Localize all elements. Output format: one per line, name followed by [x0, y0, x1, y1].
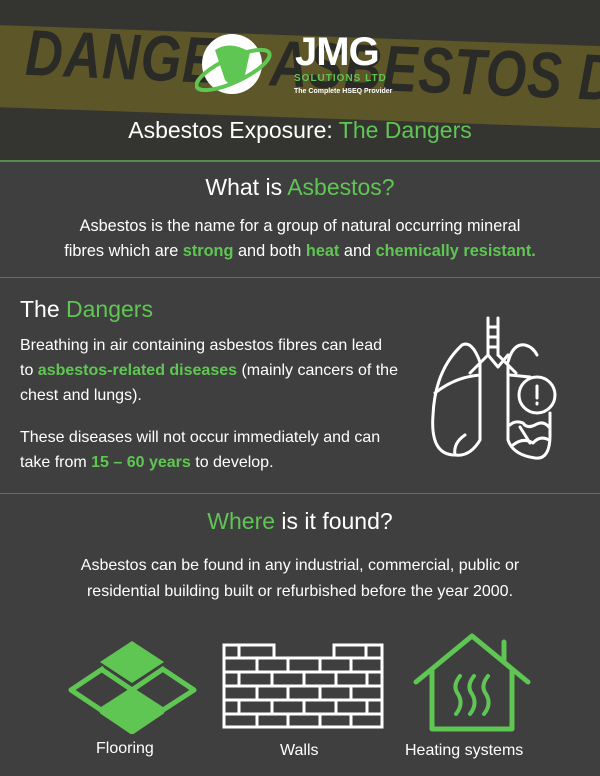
text: where: residential building built or refurbished before the year 2000. — [87, 583, 513, 600]
icon: heating house — [414, 633, 530, 732]
heading: the dangers: The Dangers — [20, 296, 153, 322]
icon: walls — [222, 644, 384, 728]
text: dangers: chest and lungs). These diseases will not occur immediately and can — [20, 387, 380, 446]
heading: what is asbestos: What is Asbestos? — [205, 174, 395, 200]
text: dangers — [20, 337, 398, 471]
text: where — [80, 557, 519, 600]
label: heating: Heating systems — [405, 742, 523, 759]
title: Asbestos Exposure: The Dangers — [128, 117, 472, 143]
logo — [195, 30, 392, 95]
label: walls: Walls — [280, 742, 319, 759]
heading: where is it found: Where is it found? — [207, 508, 393, 534]
text: dangers: to asbestos-related diseases (mainly cancers of the — [20, 362, 398, 379]
logo: The Complete HSEQ Provider — [294, 88, 392, 95]
text: definition: fibres which are strong and both heat and chemically resistant. — [64, 242, 536, 260]
label: flooring: Flooring — [96, 740, 154, 757]
icon: flooring — [68, 641, 196, 734]
hazard tape — [0, 25, 600, 129]
text: dangers: Breathing in air containing asbestos fibres can lead — [20, 337, 382, 354]
text: dangers: take from 15 – 60 years to develop. — [20, 454, 274, 471]
icon: lungs — [431, 316, 556, 460]
logo: SOLUTIONS LTD — [294, 73, 387, 84]
text: definition: Asbestos is the name for a group of natural occurring mineral — [80, 217, 520, 235]
header banner — [0, 0, 600, 160]
text: definition — [64, 217, 536, 260]
text: where: Asbestos can be found in any industrial, commercial, public or — [81, 557, 519, 574]
logo: JMG — [295, 30, 379, 74]
